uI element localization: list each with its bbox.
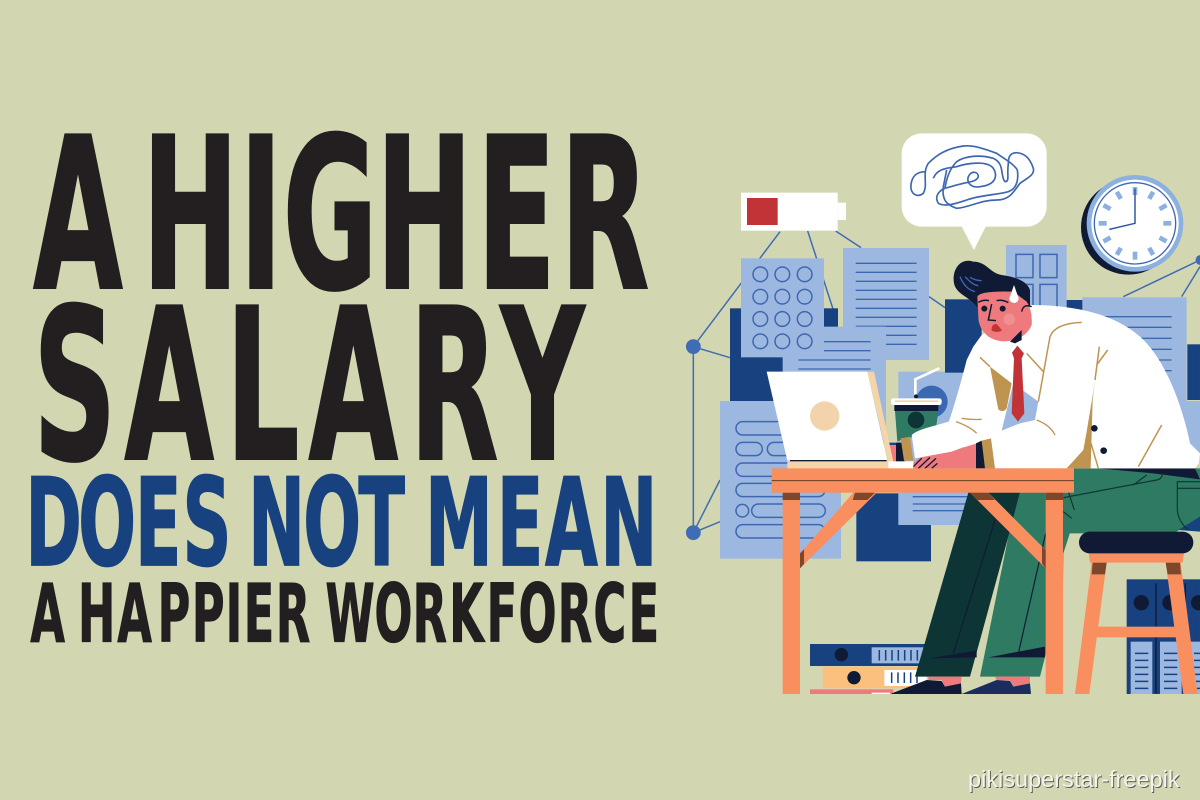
icon: low battery (741, 193, 846, 231)
title (25, 93, 659, 661)
laptop (767, 372, 913, 469)
speech bubble with tangled scribble (902, 133, 1047, 250)
illustration: stressed office worker at desk (687, 133, 1200, 694)
coffee cup with straw (891, 368, 942, 442)
tie (1012, 346, 1024, 422)
desk (772, 468, 1074, 694)
stool seat (1079, 532, 1193, 553)
network lines and nodes (687, 231, 1200, 539)
title line: A HAPPIER WORKFORCE: A HAPPIER WORKFORCE (30, 568, 659, 661)
man: legs and shoes (892, 468, 1200, 694)
binders behind stool (1127, 579, 1200, 694)
icon: wall clock (1081, 175, 1183, 275)
title line: DOES NOT MEAN: DOES NOT MEAN (25, 454, 657, 594)
photo credit: pikisuperstar-freepik (968, 766, 1180, 792)
stool (1075, 553, 1198, 694)
title line: SALARY: SALARY (33, 264, 586, 508)
background documents (720, 245, 1200, 561)
man: head (954, 261, 1032, 343)
title line: A HIGHER: A HIGHER (33, 93, 649, 337)
stacked binders under desk (810, 644, 927, 694)
hands and sleeves (886, 418, 1055, 468)
man: torso and shirt (948, 305, 1200, 468)
